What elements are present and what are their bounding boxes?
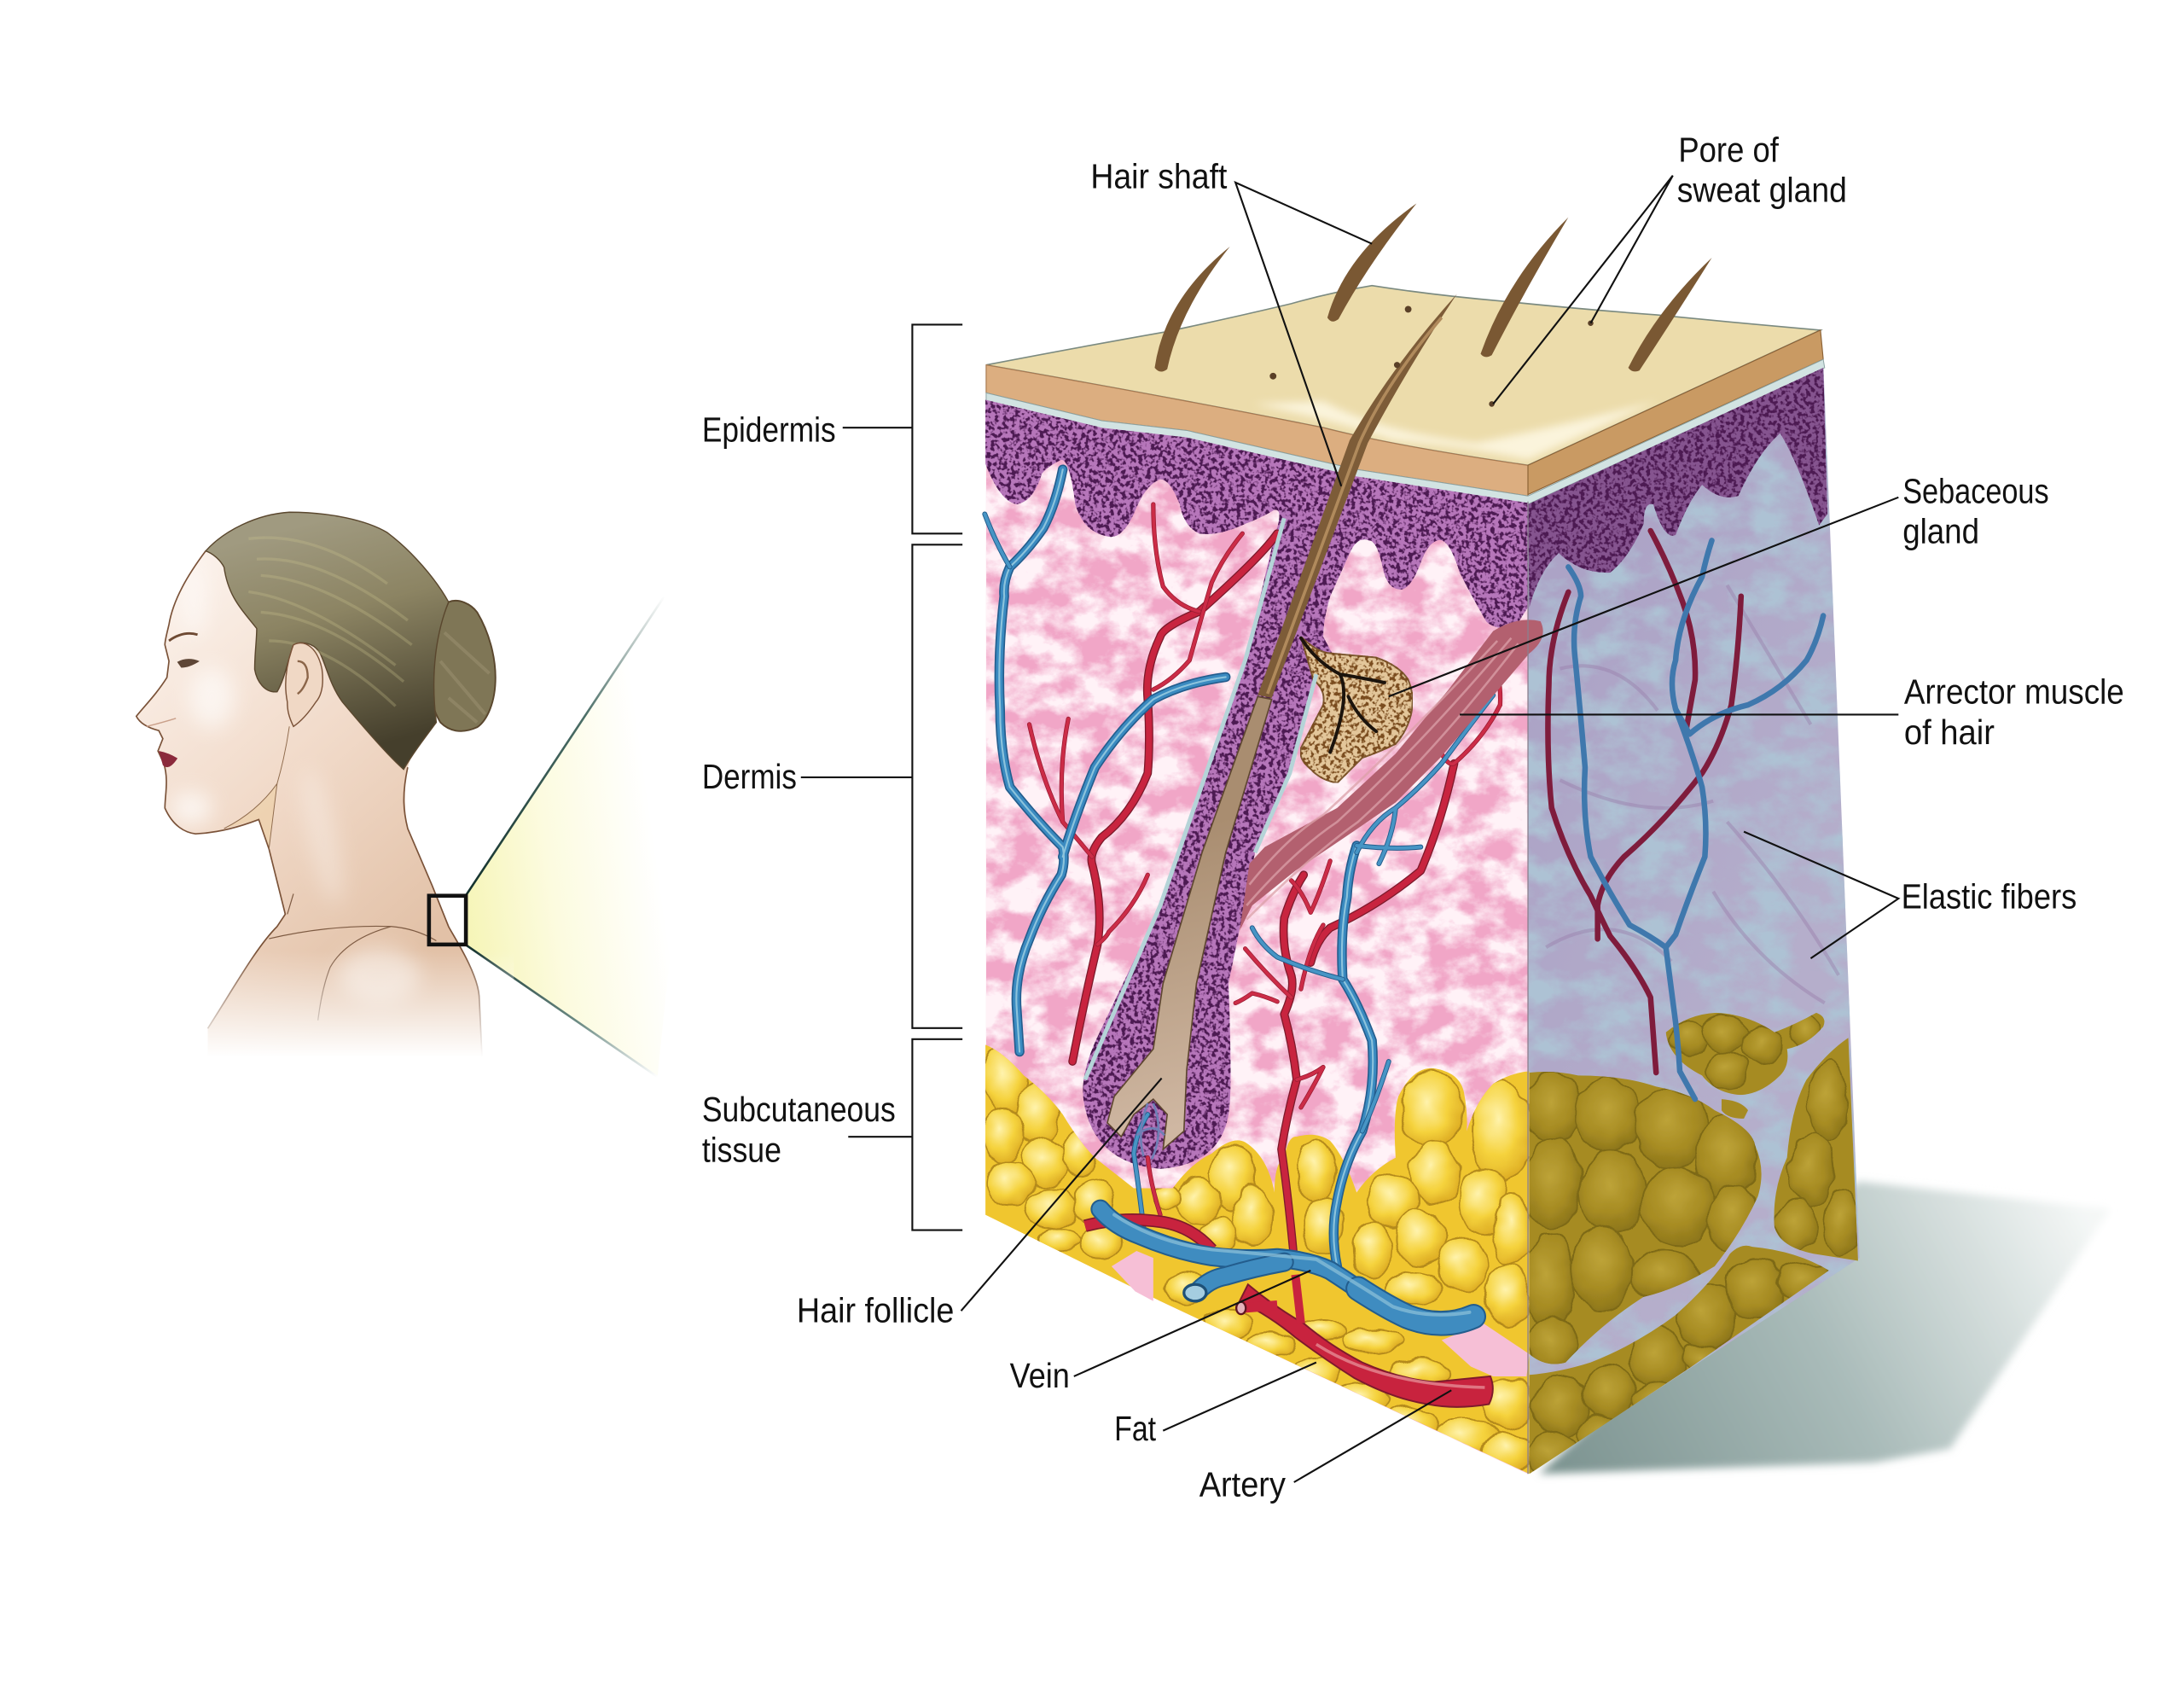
right face fat masses xyxy=(1524,1003,1867,1484)
vein opening xyxy=(1184,1284,1206,1301)
panel: front dermis face xyxy=(986,393,1528,1474)
pale basement band xyxy=(986,359,1825,504)
label: Hair shaft: Hair shaft xyxy=(1090,156,1228,195)
label: Vein: Vein xyxy=(1010,1356,1070,1395)
artery behind vein, left arc xyxy=(1085,1219,1211,1249)
surface highlights xyxy=(1253,401,1658,460)
hair root and bulb xyxy=(1107,696,1272,1149)
cast shadow of skin block xyxy=(1539,1181,2110,1474)
skin block cross-section xyxy=(975,203,1867,1491)
sweat gland pores xyxy=(1269,306,1594,407)
label: Elastic fibers xyxy=(1744,832,2077,958)
front fat layer xyxy=(975,1031,1532,1491)
epidermis strip right xyxy=(1528,330,1823,495)
artery opening xyxy=(1236,1302,1246,1314)
label: Pore of sweat gland: sweat gland xyxy=(1677,171,1847,210)
label: Sebaceous gland: Sebaceous xyxy=(1902,471,2049,510)
label: Vein xyxy=(1010,1271,1310,1395)
figure: woman in profile with skin location marker xyxy=(136,512,682,1090)
top surface of skin xyxy=(986,286,1821,465)
epidermis strip front xyxy=(986,365,1528,496)
front face blood vessels xyxy=(985,469,1501,1266)
large vein xyxy=(1101,1209,1473,1323)
zoom cone from neck to skin block xyxy=(465,596,682,1077)
gland ducts xyxy=(1301,638,1385,753)
arrector muscle of hair xyxy=(1240,620,1543,931)
large artery xyxy=(1240,1275,1493,1407)
panel: right dermis face xyxy=(1528,362,1860,1474)
label: Subcutaneous tissue with bracket: tissue xyxy=(702,1131,781,1170)
label: Arrector muscle of hair xyxy=(1460,672,2124,752)
label: Subcutaneous tissue with bracket: Subcutaneous xyxy=(702,1090,896,1129)
label: Hair follicle xyxy=(797,1079,1162,1329)
purple epidermal layer right xyxy=(1528,368,1827,608)
right face blood vessels xyxy=(1548,531,1823,1099)
label: Arrector muscle of hair: of hair xyxy=(1904,713,1995,752)
label: Pore of sweat gland xyxy=(1493,130,1847,404)
label: Fat: Fat xyxy=(1114,1409,1157,1448)
elastic fibers on right face xyxy=(1546,585,1838,1003)
label: Dermis with bracket: Dermis xyxy=(702,757,797,796)
label: Epidermis with bracket: Epidermis xyxy=(702,410,836,450)
pink dermis gaps within fat xyxy=(1112,1251,1530,1376)
label: Artery xyxy=(1199,1390,1451,1504)
artery left arc core xyxy=(1085,1219,1211,1249)
label: Fat xyxy=(1114,1363,1316,1448)
sebaceous gland xyxy=(1300,637,1413,782)
label: Sebaceous gland: gland xyxy=(1902,512,1979,551)
label: Elastic fibers: Elastic fibers xyxy=(1902,876,2077,916)
facial features xyxy=(169,633,198,641)
hair and bun xyxy=(430,601,496,731)
muscle fibres xyxy=(1246,638,1519,919)
label: Hair follicle: Hair follicle xyxy=(797,1290,954,1329)
surface hairs xyxy=(1154,203,1712,372)
papilla capillaries xyxy=(1136,1103,1165,1159)
follicle sheath edges xyxy=(1085,518,1316,1079)
label: Arrector muscle of hair: Arrector muscle xyxy=(1904,672,2124,711)
label: Sebaceous gland xyxy=(1389,471,2049,696)
head and shoulders illustration xyxy=(136,512,514,1090)
location marker box on neck xyxy=(429,896,466,945)
purple epidermal layer front with follicle sheath xyxy=(985,400,1528,1169)
main hair shaft xyxy=(1258,294,1457,698)
block edge xyxy=(1527,502,1529,1474)
ear xyxy=(286,643,322,726)
label: Artery: Artery xyxy=(1199,1464,1286,1504)
label: Pore of sweat gland: Pore of xyxy=(1678,130,1779,169)
label: Subcutaneous tissue with bracket xyxy=(702,1039,962,1230)
label: Epidermis with bracket xyxy=(702,324,962,533)
label: Dermis with bracket xyxy=(702,544,962,1028)
label: Hair shaft xyxy=(1090,156,1372,486)
